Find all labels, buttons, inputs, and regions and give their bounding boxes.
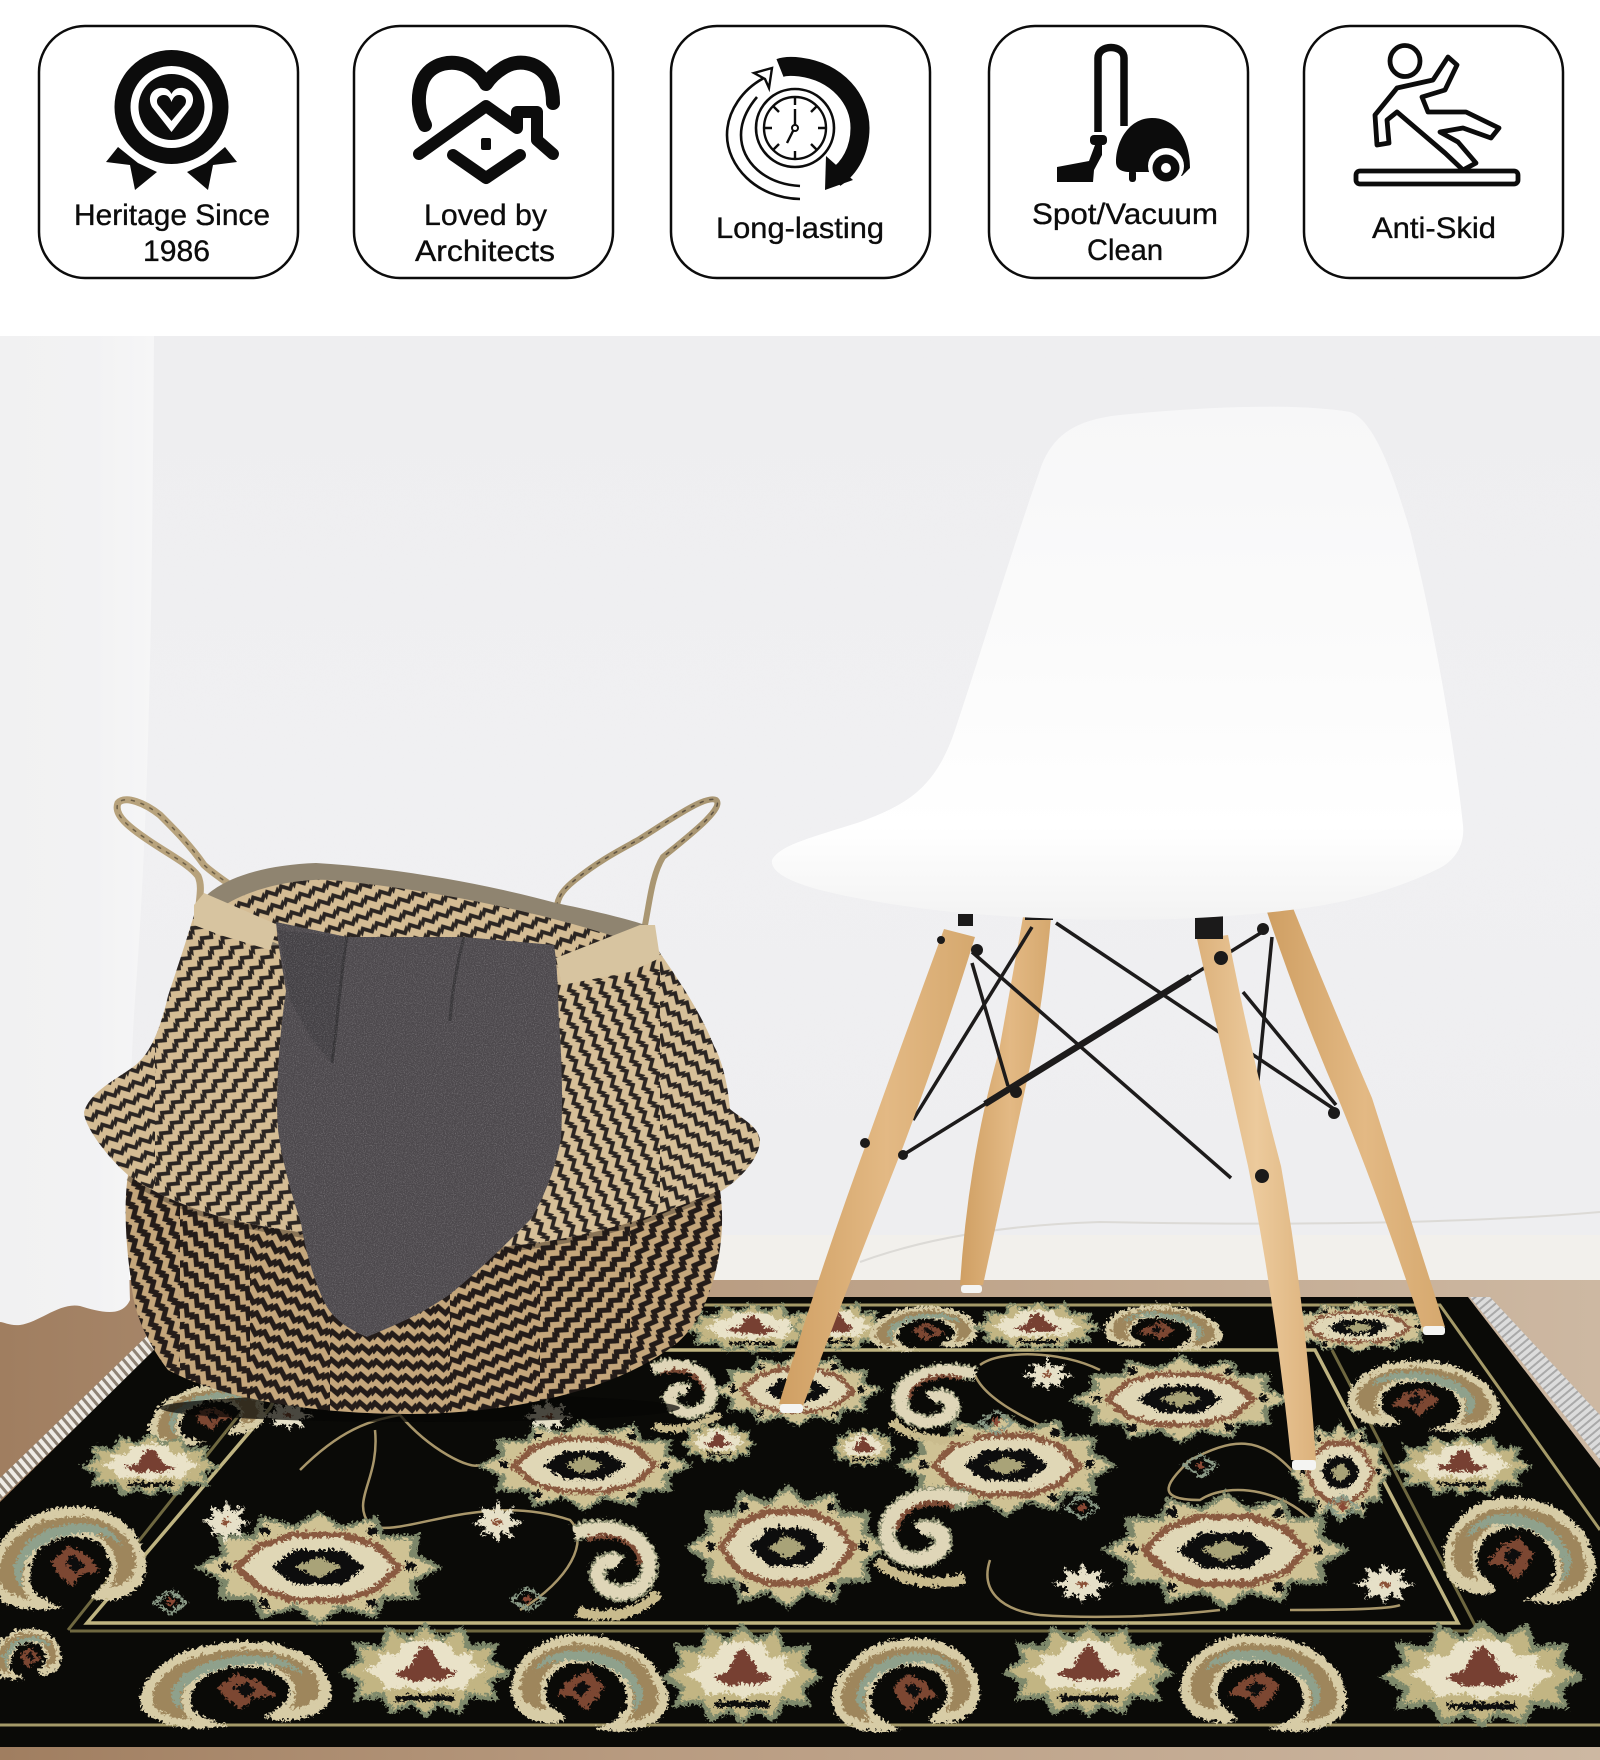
text: Heritage Since 1986: 1986 <box>143 235 210 268</box>
basket fold shadow <box>128 1178 720 1249</box>
rug border lines <box>0 1305 1600 1725</box>
wire base <box>903 923 1336 1178</box>
text: Heritage Since 1986: Heritage Since <box>74 199 270 232</box>
rug base <box>0 1297 1600 1747</box>
panel: Anti-Skid <box>1304 26 1563 278</box>
text: Heritage Since 1986 <box>74 199 270 268</box>
icon: vacuum cleaner <box>1057 48 1190 184</box>
basket handle right <box>556 799 717 925</box>
icon: clock with circular arrows <box>727 66 860 199</box>
icon: slipping figure on mat <box>1356 46 1518 184</box>
rug field motifs <box>152 1351 1413 1622</box>
wall <box>0 336 1600 1236</box>
text: Long-lasting: Long-lasting <box>716 212 884 245</box>
basket lower body <box>126 1175 722 1414</box>
text: Loved by Architects: Loved by <box>424 199 547 232</box>
curtain <box>0 336 154 1325</box>
text: Loved by Architects: Architects <box>415 235 555 268</box>
back-left leg <box>960 917 1051 1285</box>
wall cable <box>860 1212 1600 1262</box>
rug fringe left <box>0 1333 156 1500</box>
basket handle left <box>117 800 276 925</box>
rug <box>0 1297 1600 1747</box>
basket interior <box>198 863 653 960</box>
front-left leg <box>779 929 975 1406</box>
text: Anti-Skid: Anti-Skid <box>1372 212 1496 245</box>
baseboard <box>130 1235 1600 1281</box>
basket rim <box>194 893 660 985</box>
basket <box>70 799 770 1430</box>
panel: white header background <box>0 0 1600 336</box>
rug top border motifs <box>680 1298 1436 1352</box>
text: Loved by Architects <box>415 199 555 268</box>
back-right leg <box>1267 908 1445 1327</box>
rug bottom border motifs <box>0 1618 1583 1729</box>
panel: Spot/Vacuum Clean <box>989 26 1248 278</box>
rug motifs <box>0 1298 1593 1729</box>
rug fringe right <box>1470 1297 1600 1460</box>
panel: Long-lasting <box>671 26 930 278</box>
panel: Loved by Architects <box>354 26 613 278</box>
rug side border motifs <box>0 1359 1593 1607</box>
chair shell <box>772 407 1463 920</box>
basket shadow <box>160 1394 680 1422</box>
text: Spot/Vacuum Clean: Spot/Vacuum <box>1032 198 1218 231</box>
blanket <box>276 922 562 1337</box>
text: Spot/Vacuum Clean: Clean <box>1087 234 1163 267</box>
front-right leg <box>1197 935 1316 1460</box>
panel: Heritage Since 1986 <box>39 26 298 278</box>
icon: rosette with heart <box>106 46 237 190</box>
rug vines <box>300 1354 1400 1617</box>
text: Spot/Vacuum Clean <box>1032 198 1218 267</box>
basket upper body <box>70 900 770 1250</box>
leg mounts and bolts <box>860 912 1340 1183</box>
chair <box>772 407 1463 1470</box>
icon: heart and house <box>419 63 553 178</box>
floor <box>0 1280 1600 1760</box>
